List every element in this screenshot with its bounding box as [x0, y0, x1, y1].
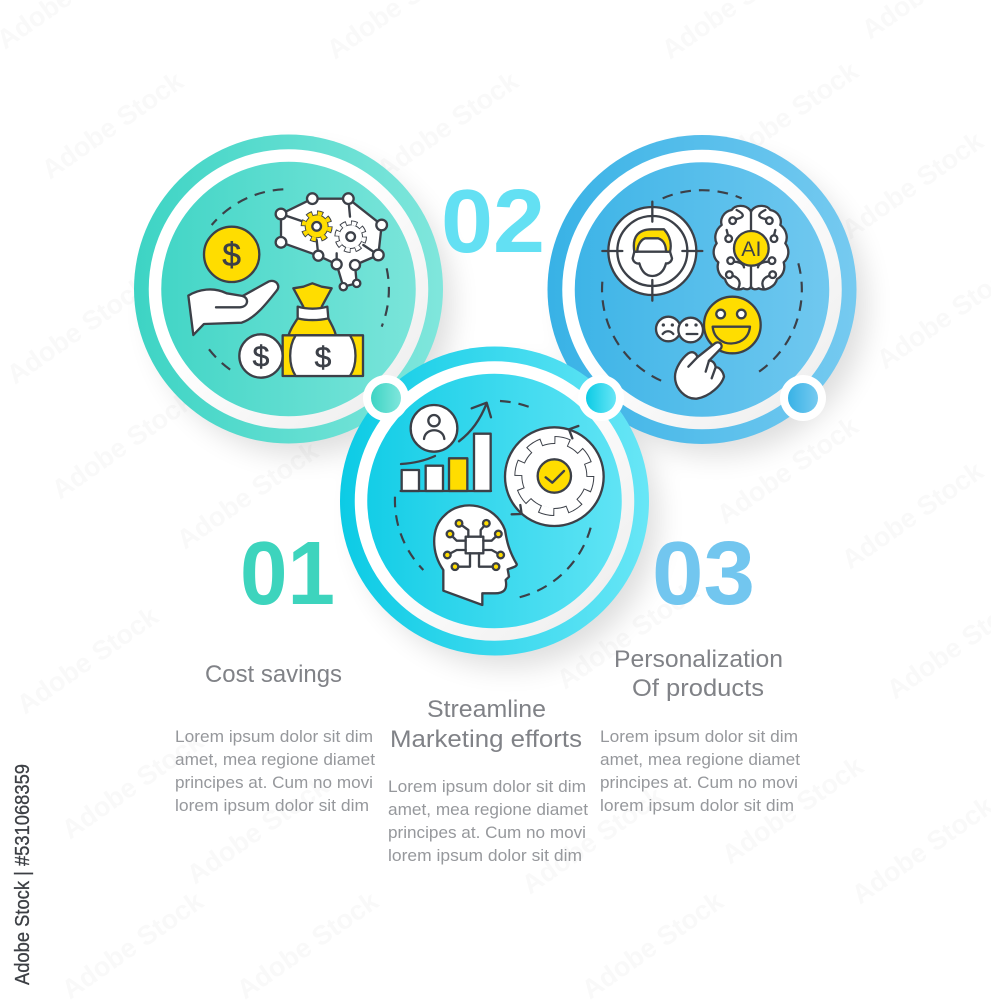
heading: streamline marketing efforts: Streamline	[427, 696, 546, 723]
number 03: 03	[652, 524, 755, 624]
text block: personalization: principes at. Cum no movi	[600, 774, 798, 792]
heading: streamline marketing efforts	[390, 696, 582, 753]
icon: money bag and banknote: $	[253, 341, 270, 374]
background watermark: Adobe Stock	[46, 385, 199, 505]
background watermark: Adobe Stock	[836, 455, 989, 575]
icon: gear with check	[505, 426, 604, 526]
heading: cost savings: Cost savings	[205, 661, 342, 688]
icon: AI brain with gears	[276, 193, 387, 290]
text block: cost savings: lorem ipsum dolor sit dim	[175, 797, 369, 815]
background watermark: Adobe Stock	[716, 750, 869, 870]
text block: cost savings: amet, mea regione diamet	[175, 751, 375, 769]
background watermark: Adobe Stock	[711, 55, 864, 175]
icon: AI brain: AI	[741, 237, 761, 261]
number 01: 01	[240, 524, 335, 624]
icons: personalization	[602, 190, 802, 399]
background watermark: Adobe Stock	[1, 270, 154, 390]
text block: personalization: lorem ipsum dolor sit dim	[600, 797, 794, 815]
text block: streamline marketing: Lorem ipsum dolor sit dim	[388, 778, 586, 796]
icon: AI head with circuit	[434, 505, 517, 605]
background watermark: Adobe Stock	[371, 65, 524, 185]
icon: money bag and banknote	[239, 283, 363, 378]
icon: coin in hand	[188, 227, 278, 335]
panel: circle 3 streamline marketing	[340, 346, 649, 656]
connector dot 2	[578, 375, 624, 421]
background watermark: Adobe Stock	[516, 780, 669, 900]
icon: emoji rating and pointing hand	[656, 297, 761, 399]
text block: cost savings: principes at. Cum no movi	[175, 774, 373, 792]
panel: circle 2 personalization	[548, 135, 856, 444]
heading: personalization of products: Of products	[632, 675, 764, 702]
icon: AI brain	[714, 206, 788, 289]
connector dot 1	[363, 375, 409, 421]
icon: target on customer	[602, 202, 702, 301]
heading: personalization of products	[614, 646, 783, 702]
text block: streamline marketing	[388, 778, 588, 865]
icon: money bag and banknote: $	[315, 341, 332, 374]
stock id vertical label: Adobe Stock | #531068359	[12, 764, 34, 985]
background watermark: Adobe Stock	[181, 770, 334, 890]
text block: streamline marketing: lorem ipsum dolor sit dim	[388, 847, 582, 865]
background watermark: Adobe Stock	[36, 65, 189, 185]
circle shadows	[152, 155, 866, 667]
background watermark: Adobe Stock	[836, 125, 989, 245]
heading: streamline marketing efforts: Marketing efforts	[390, 726, 582, 753]
text block: streamline marketing: principes at. Cum no movi	[388, 824, 586, 842]
background watermark: Adobe Stock	[171, 435, 324, 555]
icon: growth chart with customer	[401, 403, 491, 491]
background watermark: Adobe Stock	[56, 725, 209, 845]
text block: cost savings: Lorem ipsum dolor sit dim	[175, 728, 373, 746]
background watermark: Adobe Stock	[551, 575, 704, 695]
background watermark: Adobe Stock	[11, 600, 164, 720]
heading: personalization of products: Personalization	[614, 646, 783, 673]
icon: coin in hand: $	[222, 237, 241, 274]
number 02: 02	[441, 172, 545, 272]
panel: circle 1 cost savings	[134, 134, 443, 444]
text block: personalization: Lorem ipsum dolor sit dim	[600, 728, 798, 746]
icons: streamline marketing	[395, 401, 604, 605]
icons: cost savings	[188, 189, 389, 378]
text block: personalization: amet, mea regione diamet	[600, 751, 800, 769]
background watermark: Adobe Stock	[711, 410, 864, 530]
text block: streamline marketing: amet, mea regione diamet	[388, 801, 588, 819]
text block: cost savings	[175, 728, 375, 815]
connector dot 3	[780, 375, 826, 421]
text block: personalization	[600, 728, 800, 815]
